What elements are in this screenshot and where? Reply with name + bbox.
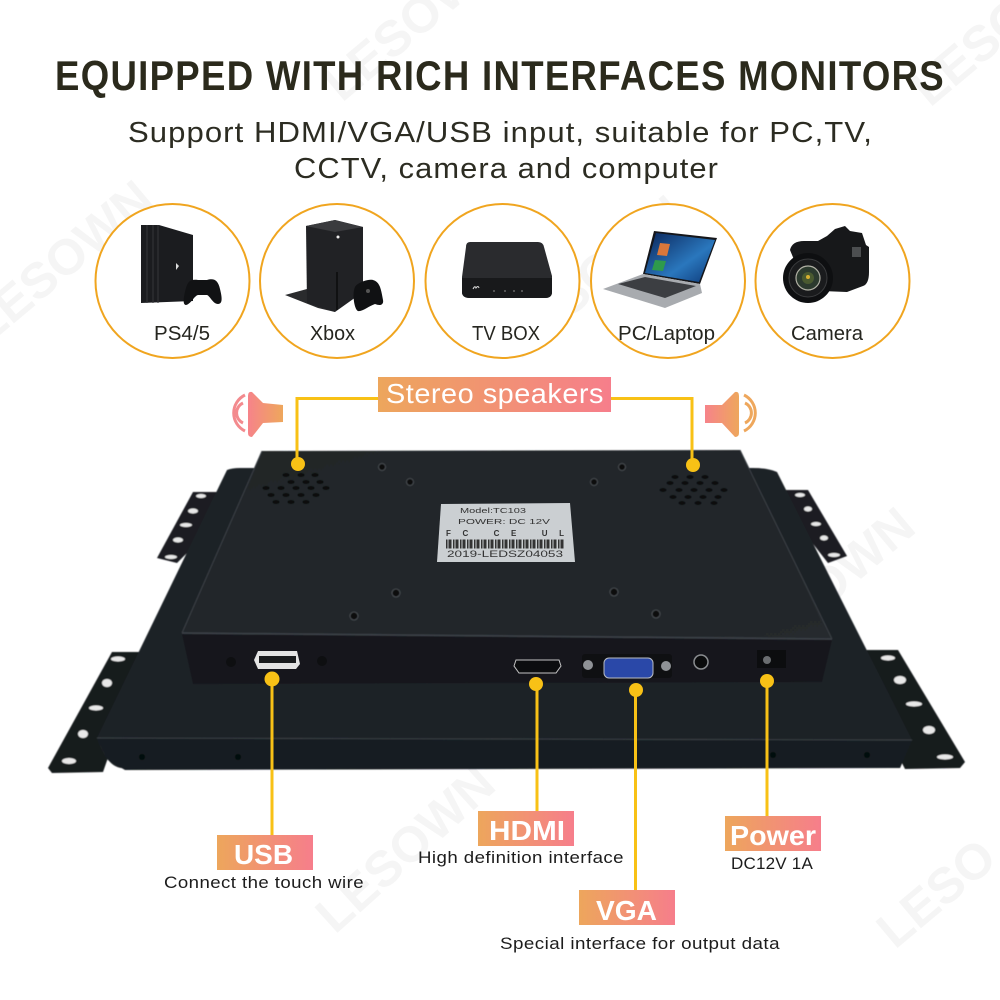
subtitle [128,117,873,185]
product label sticker: Model:TC103 [460,506,526,515]
speaker grille right [660,475,728,505]
device: Xbox [260,204,414,358]
icon: TV box [462,242,552,298]
callout: USB [164,672,364,892]
callout: USB: USB [234,839,293,870]
subtitle: Support HDMI/VGA/USB input, suitable for PC,TV, [128,117,873,149]
label: TV BOX: TV BOX [472,323,540,345]
monitor back photo [48,450,965,773]
watermarks: LESOWN [491,184,695,368]
device: Camera [756,204,910,358]
label: Camera: Camera [791,323,864,345]
port: audio [694,655,708,669]
callout: HDMI [418,677,624,867]
label: Xbox: Xbox [310,323,355,345]
bracket: lower left [48,652,145,773]
mounting screws [350,464,660,620]
port: DC power [757,650,786,668]
callout: Power: Power [730,820,816,851]
icon: speaker right [705,392,755,437]
callout: Power [725,674,821,873]
device: TV BOX [426,204,580,358]
product label sticker: 2019-LEDSZ04053 [447,549,563,559]
device: PC/Laptop [591,204,745,358]
port: HDMI [514,660,561,673]
callout: stereo speakers: Stereo speakers [386,378,604,409]
port: VGA [582,654,672,678]
icon: console [285,220,383,312]
icon: camera [783,226,869,303]
callout: stereo speakers [291,377,700,472]
monitor front edge [182,450,832,684]
watermarks: LESOWN [305,755,505,943]
speaker grille left [262,473,330,504]
back plate [97,468,912,770]
product label sticker: POWER: DC 12V [458,517,550,526]
port: USB [254,651,300,669]
ports [226,650,786,678]
icon: console [141,225,222,305]
icon: laptop [603,231,717,308]
callout: HDMI: HDMI [489,815,565,846]
monitor top face [182,450,832,638]
bracket: lower right [862,650,965,769]
callout: USB: Connect the touch wire [164,873,364,892]
label: PS4/5: PS4/5 [154,323,210,345]
callout: VGA: Special interface for output data [500,934,780,953]
subtitle: CCTV, camera and computer [294,153,719,185]
callout: VGA [500,683,780,953]
label: PC/Laptop: PC/Laptop [618,323,715,345]
watermarks: LESOWN [721,496,925,680]
callout: HDMI: High definition interface [418,848,624,867]
callout: VGA: VGA [596,895,657,926]
bracket: upper left [157,492,220,563]
product label sticker [437,503,575,562]
bracket: upper right [785,490,847,563]
callout: Power: DC12V 1A [731,854,813,873]
device: PS4/5 [96,204,250,358]
icon: speaker left [234,392,283,437]
product label sticker: FC CE UL [446,529,564,538]
